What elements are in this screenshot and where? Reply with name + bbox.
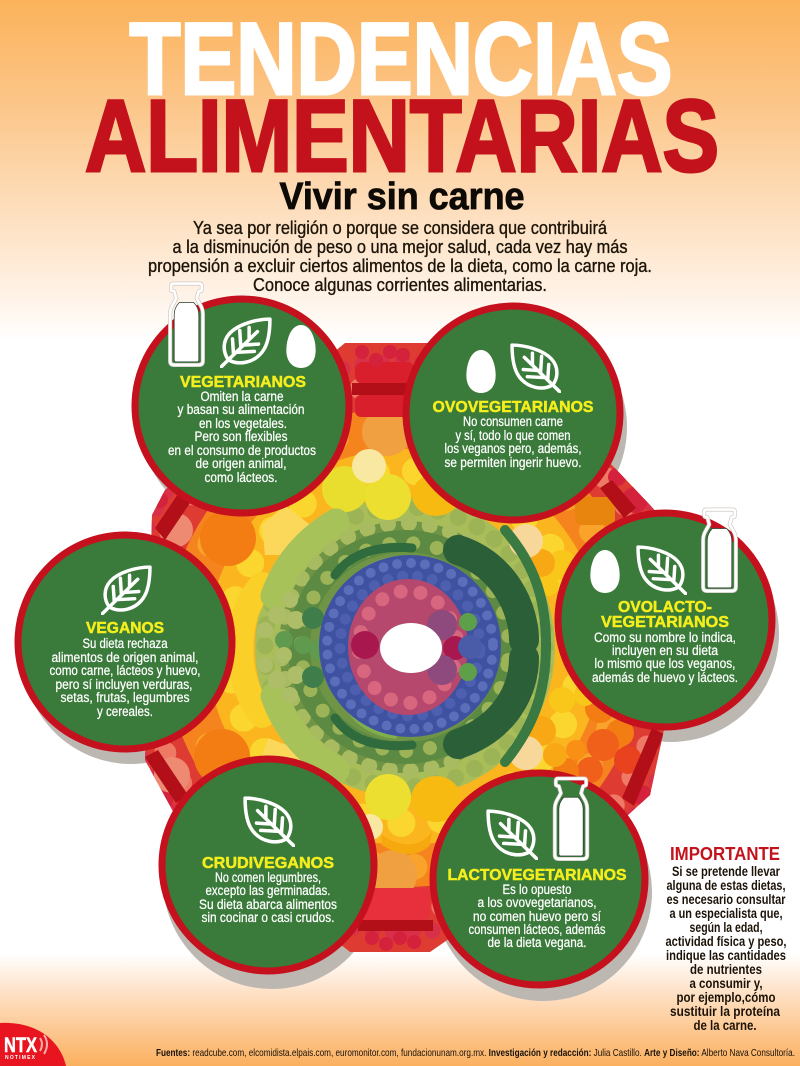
description: excepto las germinadas. <box>206 883 330 898</box>
description: no comen huevo pero sí <box>473 909 601 924</box>
note heading: IMPORTANTE <box>670 844 780 864</box>
logo: NTX Notimex: NOTIMEX <box>5 1055 36 1061</box>
description <box>168 389 316 485</box>
note text: Si se pretende llevar <box>672 864 781 879</box>
note text <box>666 864 786 1033</box>
zucchini <box>274 522 546 770</box>
description: sin cocinar o casi crudos. <box>202 910 334 925</box>
description: de origen animal, <box>196 456 286 471</box>
description: como carne, lácteos y huevo, <box>50 663 200 678</box>
heading: LACTOVEGETARIANOS <box>448 867 627 884</box>
description: y sí, todo lo que comen <box>456 428 570 443</box>
description: los veganos pero, además, <box>444 441 582 456</box>
icon: milk bottle <box>555 779 587 859</box>
heading: CRUDIVEGANOS <box>202 855 334 872</box>
intro text: Conoce algunas corrientes alimentarias. <box>253 275 547 295</box>
circle: lactovegetarianos <box>433 773 645 985</box>
icon: milk bottle <box>703 510 736 591</box>
icon: leaf <box>102 567 150 614</box>
description: No comen legumbres, <box>215 870 321 885</box>
description: a los ovovegetarianos, <box>478 895 596 910</box>
description: consumen lácteos, además <box>468 922 606 937</box>
grape cluster <box>257 592 331 703</box>
description <box>50 636 200 719</box>
icon: egg <box>286 325 316 368</box>
heading: VEGETARIANOS <box>601 614 729 631</box>
circle: veganos <box>18 535 232 749</box>
description <box>444 414 582 470</box>
description: de la dieta vegana. <box>488 935 586 950</box>
icon: leaf <box>245 798 294 846</box>
red peppers <box>355 362 430 920</box>
pineapple <box>362 408 417 900</box>
description <box>199 870 337 925</box>
heading <box>601 599 729 631</box>
heading: OVOLACTO- <box>618 599 712 616</box>
icon: leaf <box>638 547 686 594</box>
description: Pero son flexibles <box>194 429 288 444</box>
description: Su dieta abarca alimentos <box>199 897 337 912</box>
description: lo mismo que los veganos, <box>594 656 736 671</box>
intro text: a la disminución de peso o una mejor salud, cada vez hay más <box>172 237 628 257</box>
note text: de nutrientes <box>690 962 762 977</box>
circle: ovovegetarianos <box>406 306 620 520</box>
description: y basan su alimentación <box>178 402 304 417</box>
icon: leaf <box>512 345 560 392</box>
intro text: Ya sea por religión o porque se considera que contribuirá <box>193 218 608 238</box>
note text: a consumir y, <box>690 976 762 991</box>
subtitle: Vivir sin carne <box>280 176 524 218</box>
logo: NTX Notimex <box>0 1023 66 1066</box>
apples and lemons <box>322 449 543 840</box>
circle: vegetarianos <box>135 284 349 513</box>
description: incluyen en su dieta <box>612 643 718 658</box>
icon: leaf <box>221 319 270 367</box>
blue berries <box>319 555 501 737</box>
heading: VEGETARIANOS <box>180 374 306 391</box>
icon: egg <box>590 550 620 593</box>
red bands <box>145 383 664 931</box>
icon: egg <box>466 350 496 393</box>
circle: ovolactovegetarianos <box>558 510 772 727</box>
note text: sustituir la proteína <box>670 1004 780 1019</box>
note text: según la edad, <box>690 920 762 935</box>
description <box>468 882 606 950</box>
description: Su dieta rechaza <box>82 636 168 651</box>
description: como lácteos. <box>204 470 278 485</box>
description: No consumen carne <box>463 414 563 429</box>
description <box>592 630 738 685</box>
title: TENDENCIAS <box>130 2 672 116</box>
berries <box>152 345 652 951</box>
plums <box>348 579 468 715</box>
description: alimentos de origen animal, <box>52 650 198 665</box>
heading: VEGANOS <box>86 620 164 637</box>
heading: OVOVEGETARIANOS <box>432 399 594 416</box>
intro text: propensión a excluir ciertos alimentos de la dieta, como la carne roja. <box>148 256 652 276</box>
icon: milk bottle <box>170 284 203 365</box>
banana <box>240 585 262 715</box>
description: setas, frutas, legumbres <box>60 690 190 705</box>
icon: leaf <box>488 811 537 859</box>
salmon fruits <box>154 513 193 793</box>
description: y cereales. <box>97 704 153 719</box>
oranges <box>194 497 642 785</box>
note text: de la carne. <box>694 1018 756 1033</box>
food mandala <box>145 343 664 952</box>
description: en el consumo de productos <box>168 443 316 458</box>
description: además de huevo y lácteos. <box>592 670 738 685</box>
yellow fruits <box>255 505 596 854</box>
circle: crudiveganos <box>162 759 374 971</box>
description: Es lo opuesto <box>502 882 572 897</box>
note text: por ejemplo,cómo <box>676 990 776 1005</box>
description: Omiten la carne <box>200 389 284 404</box>
title <box>85 2 719 193</box>
description: se permiten ingerir huevo. <box>444 455 582 470</box>
intro text <box>148 218 652 295</box>
logo: NTX Notimex: NTX <box>4 1034 37 1057</box>
description: Como su nombre lo indica, <box>594 630 736 645</box>
description: en los vegetales. <box>199 416 287 431</box>
grape ring <box>265 507 545 787</box>
important note <box>666 844 786 1033</box>
circle shadows <box>23 312 779 1001</box>
description: pero sí incluyen verduras, <box>56 677 192 692</box>
